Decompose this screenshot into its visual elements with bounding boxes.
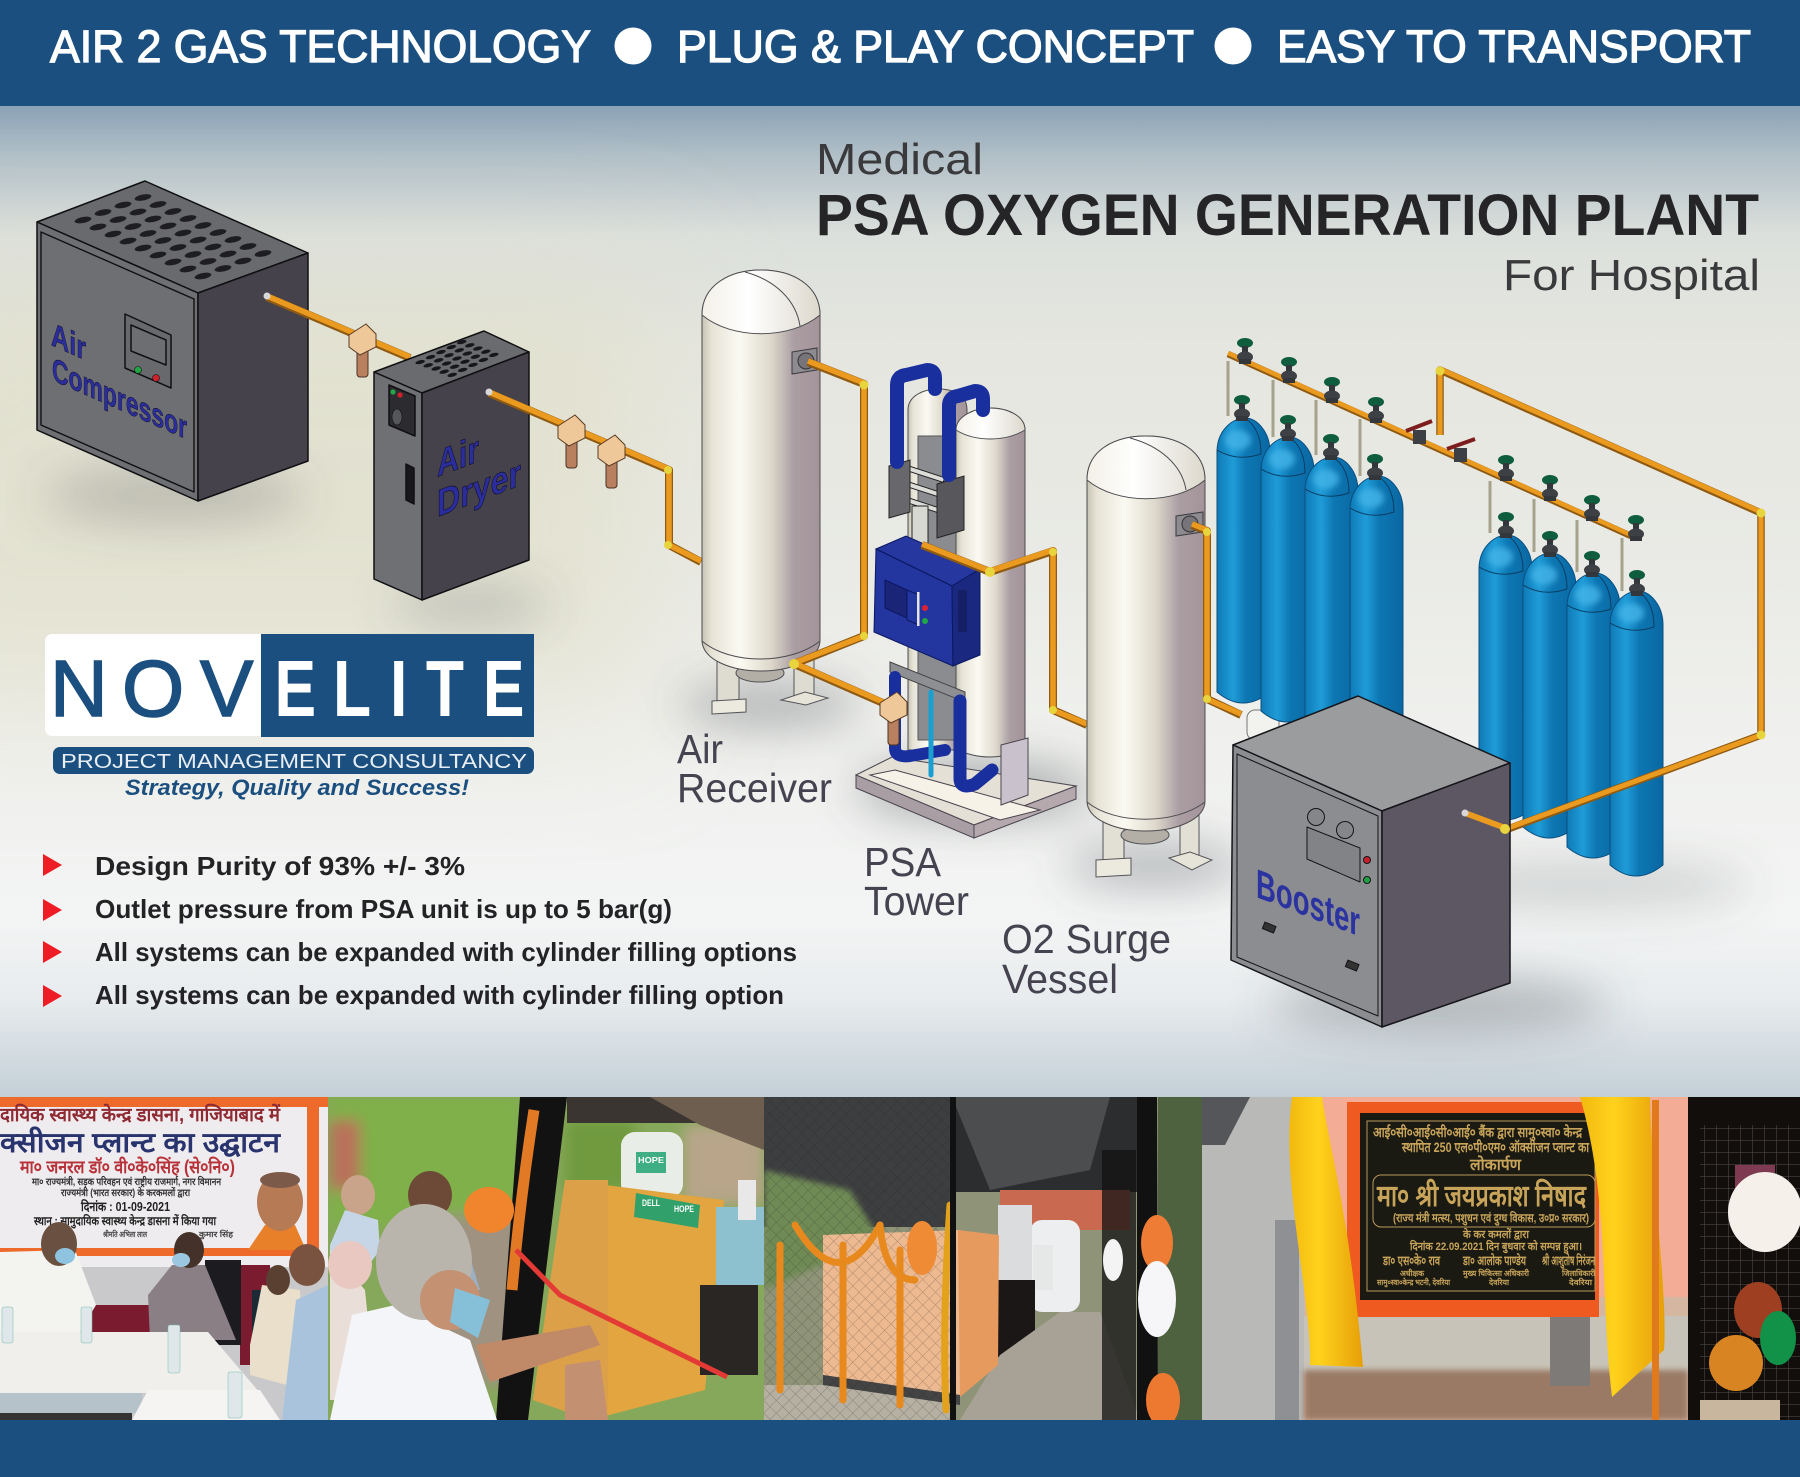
pipe: dryer to air receiver — [486, 388, 701, 562]
white vessel — [621, 1132, 683, 1198]
title block — [816, 135, 1760, 300]
compressor label — [51, 316, 187, 447]
cylinder bank: right group — [1479, 512, 1663, 876]
icon: air dryer cabinet — [374, 331, 529, 600]
banner text lines — [0, 1103, 282, 1240]
water bottles — [2, 1307, 242, 1418]
icon: filters on dryer line — [558, 415, 625, 488]
logo wordmark ELITE: I — [390, 645, 407, 734]
label: O2 surge vessel — [1002, 916, 1171, 1002]
surge vessel legs — [1096, 810, 1212, 877]
receiver flange — [792, 348, 817, 374]
yellow curtains — [1289, 1097, 1665, 1420]
banner text lines: मा० राज्यमंत्री, सड़क परिवहन एवं राष्ट्रीय राजमार्ग, नगर विमानन — [31, 1175, 221, 1188]
banner text lines: दिनांक : 01-09-2021 — [80, 1199, 170, 1214]
logo wordmark ELITE: T — [426, 645, 464, 734]
plaque text lines: आई०सी०आई०सी०आई० बैंक द्वारा सामु०स्वा० केन्द्र — [1373, 1124, 1582, 1142]
label: O2 surge vessel: O2 Surge — [1002, 916, 1171, 962]
ground shadows — [45, 465, 1750, 1033]
booster gauges and screen — [1262, 808, 1370, 971]
pipe: manifold and return line — [1228, 353, 1766, 829]
banner text lines: राज्यमंत्री (भारत सरकार) के करकमलों द्वारा — [60, 1186, 190, 1199]
label: PSA tower: PSA — [864, 839, 942, 885]
blue lower pipes — [895, 677, 992, 786]
label: air receiver — [677, 726, 832, 811]
icon: air compressor cabinet — [37, 181, 308, 501]
plaque text lines: देवरिया — [1488, 1277, 1510, 1287]
photo: inauguration banner and seated guests — [0, 1097, 328, 1420]
banner text lines: दायिक स्वास्थ्य केन्द्र डासना, गाजियाबाद में — [0, 1103, 281, 1126]
plaque text lines: देवरिया — [1568, 1277, 1593, 1287]
bullet 3: All systems can be expanded with cylinder filling options — [95, 937, 797, 967]
balloons — [1709, 1172, 1800, 1391]
plaque text lines: डा० एस०के० राव — [1382, 1253, 1441, 1268]
plaque — [1347, 1102, 1599, 1317]
cage mesh — [764, 1097, 954, 1420]
plaque text lines: डा० आलोक पाण्डेय — [1462, 1253, 1526, 1268]
plaque text lines: सामु०स्वा०केन्द्र भटनी, देवरिया — [1376, 1277, 1451, 1288]
PSA tower unit — [856, 370, 1076, 838]
ball valves — [1406, 421, 1475, 462]
grey valve blocks — [889, 460, 964, 549]
dark cabinet — [997, 1280, 1035, 1357]
banner text lines: श्रीमति अभिला लाल — [102, 1229, 147, 1239]
plaque text lines: मुख्य चिकित्सा अधिकारी — [1462, 1268, 1530, 1279]
trees and fence — [330, 1097, 764, 1385]
logo tagline: Strategy, Quality and Success! — [125, 775, 469, 800]
plaque text lines: जिलाधिकारी — [1561, 1268, 1596, 1278]
black posts — [950, 1097, 1158, 1420]
cylinder bank: left group — [1217, 395, 1403, 761]
label: PSA tower — [864, 839, 969, 924]
label: air receiver: Receiver — [677, 765, 832, 811]
banner text lines: मा० जनरल डॉ० वी०के०सिंह (से०नि०) — [19, 1156, 235, 1177]
cabinet sponsor labels: DELL — [642, 1198, 660, 1208]
receiver legs — [712, 655, 828, 714]
photo: ribbon cutting — [328, 1097, 764, 1420]
portrait — [248, 1172, 306, 1250]
roof — [567, 1097, 764, 1150]
dryer label: Dryer — [437, 451, 521, 526]
lower wall — [1304, 1316, 1688, 1420]
bullet dot — [1214, 28, 1252, 64]
black post — [496, 1097, 567, 1420]
header: easy to transport: EASY TO TRANSPORT — [1277, 21, 1751, 72]
right foliage — [1158, 1097, 1202, 1420]
bystanders — [328, 1171, 480, 1400]
logo wordmark NOV: O — [122, 644, 184, 733]
dryer label: Air — [437, 427, 479, 486]
bullet dot — [614, 28, 652, 64]
bullet 4: All systems can be expanded with cylinder filling option — [95, 980, 784, 1010]
background — [0, 106, 1800, 1097]
grey plate — [918, 436, 965, 740]
small white cap behind booster — [1247, 710, 1279, 740]
logo strap pill — [53, 747, 534, 774]
cabinet sponsor labels: HOPE — [674, 1204, 694, 1214]
logo wordmark ELITE: L — [333, 645, 371, 734]
green patch — [764, 1170, 880, 1290]
bullet 2: Outlet pressure from PSA unit is up to 5 bar(g) — [95, 894, 672, 924]
pipe: receiver to PSA tower — [789, 361, 883, 703]
footer band — [0, 1420, 1800, 1477]
banner text lines: क्सीजन प्लान्ट का उद्घाटन — [0, 1126, 282, 1158]
plaque text lines: मा० श्री जयप्रकाश निषाद — [1376, 1178, 1587, 1213]
photo: plant behind mesh cage — [764, 1097, 1202, 1427]
surge flange — [1176, 512, 1203, 536]
marigold garland — [512, 1110, 534, 1290]
label: O2 surge vessel: Vessel — [1002, 956, 1118, 1002]
title: main: PSA OXYGEN GENERATION PLANT — [816, 183, 1759, 248]
seated men — [0, 1222, 328, 1420]
blue pipe loops — [897, 370, 983, 475]
pipe: booster outlet — [1462, 810, 1510, 834]
roof — [950, 1097, 1140, 1192]
manifold valves — [1237, 338, 1644, 541]
bullet 1: Design Purity of 93% +/- 3% — [95, 851, 465, 881]
dark upper mesh — [764, 1097, 954, 1227]
maroon wall and chair — [90, 1260, 272, 1365]
white tables — [0, 1332, 280, 1420]
marigold garlands — [780, 1205, 950, 1410]
title: for hospital: For Hospital — [1503, 251, 1760, 300]
title: medical: Medical — [816, 135, 983, 184]
plaque text lines: लोकार्पण — [1469, 1155, 1522, 1174]
red ribbon — [516, 1250, 727, 1377]
plaque text lines: अधीक्षक — [1400, 1268, 1425, 1278]
grey wall — [1202, 1097, 1304, 1420]
feature bullet list — [43, 851, 797, 1010]
logo: Novelite — [45, 634, 534, 800]
person right — [700, 1180, 764, 1375]
equipment labels — [677, 726, 1171, 1002]
peach compressor — [823, 1230, 999, 1405]
plaque text lines: स्थापित 250 एल०पी०एम० ऑक्सीजन प्लान्ट का — [1401, 1139, 1590, 1155]
header band — [0, 0, 1800, 106]
photo: dedication plaque with curtains — [1202, 1097, 1800, 1420]
cabinet sponsor labels — [642, 1200, 694, 1212]
blue control panel — [874, 536, 980, 666]
pipe: surge vessel to booster — [1192, 524, 1241, 715]
plaque text lines: श्री आशुतोष निरंजन — [1541, 1253, 1595, 1269]
surge vessel — [1087, 436, 1212, 877]
balloons — [907, 1215, 1180, 1427]
label: air receiver: Air — [677, 726, 723, 772]
background wall — [1000, 1190, 1130, 1230]
bottom filter — [880, 692, 907, 745]
support stand — [1001, 738, 1028, 805]
pipe: compressor to dryer — [264, 292, 410, 358]
logo strap pill: PROJECT MANAGEMENT CONSULTANCY — [61, 751, 527, 773]
pink wall — [1304, 1097, 1688, 1297]
plaque text lines: (राज्य मंत्री मत्स्य, पशुधन एवं दुग्ध विकास, उ०प्र० सरकार) — [1393, 1211, 1589, 1226]
banner — [0, 1097, 328, 1267]
compressor label: Air — [51, 316, 86, 368]
plaque outlines — [1367, 1121, 1595, 1291]
grey lower manifold — [890, 662, 965, 702]
header: air 2 gas: AIR 2 GAS TECHNOLOGY — [50, 21, 591, 72]
banner text lines: कुमार सिंह — [198, 1229, 234, 1240]
logo wordmark NOV: N — [50, 644, 108, 733]
white tank and tower — [998, 1205, 1080, 1312]
icon: filter on compressor line — [349, 324, 376, 377]
dryer control strip — [389, 385, 415, 504]
pipe: PSA tower to surge vessel — [922, 544, 1087, 725]
compressor control display — [125, 314, 171, 388]
logo wordmark ELITE: E — [275, 645, 316, 734]
black fence section — [1688, 1097, 1800, 1420]
banner text lines: स्थान : सामुदायिक स्वास्थ्य केन्द्र डासना में किया गया — [33, 1214, 217, 1229]
skid base — [856, 757, 1076, 838]
header: plug and play: PLUG & PLAY CONCEPT — [677, 21, 1194, 72]
logo wordmark NOV: V — [200, 644, 254, 733]
plaque text lines — [1373, 1124, 1596, 1288]
air receiver vessel — [702, 270, 828, 714]
back tower — [908, 389, 967, 750]
plaque text lines: के कर कमलों द्वारा — [1462, 1227, 1530, 1241]
front tower — [956, 408, 1025, 757]
logo wordmark ELITE: E — [483, 645, 524, 734]
label: PSA tower: Tower — [864, 878, 969, 924]
white vessel: HOPE — [638, 1156, 665, 1165]
icon: booster cabinet — [1231, 696, 1510, 1027]
plaque text lines: दिनांक 22.09.2021 दिन बुधवार को सम्पन्न हुआ। — [1409, 1239, 1582, 1254]
booster label: Booster — [1256, 860, 1360, 945]
orange cabinet — [533, 1180, 724, 1420]
compressor label: Compressor — [52, 351, 187, 447]
main man in white shirt — [330, 1204, 608, 1420]
floor — [960, 1312, 1140, 1420]
orange balloon — [464, 1187, 514, 1233]
